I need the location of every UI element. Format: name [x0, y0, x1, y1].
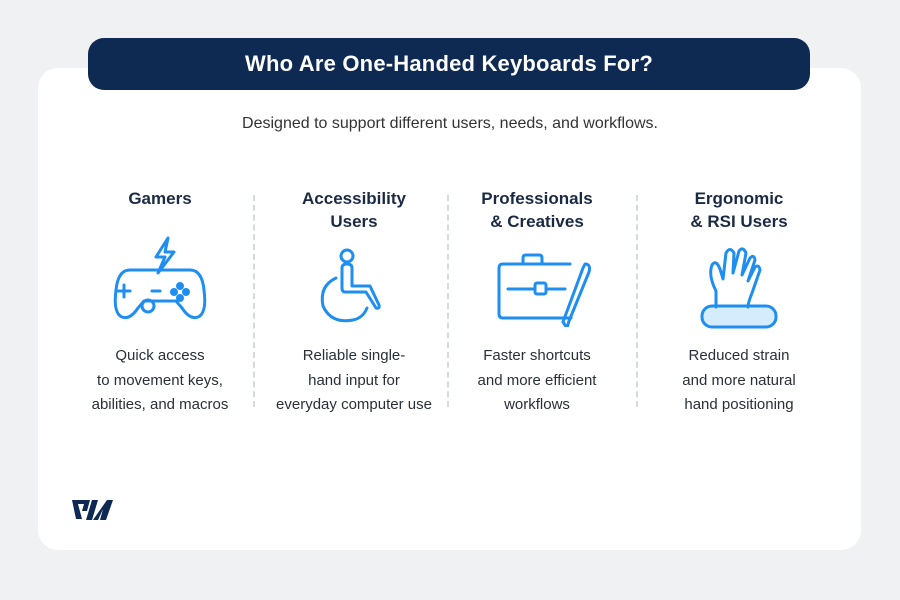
title: Who Are One-Handed Keyboards For?: [245, 51, 653, 76]
logo: [72, 500, 113, 520]
description: gamers: [92, 347, 228, 413]
description: gamers: Quick access: [115, 347, 205, 364]
description: gamers: abilities, and macros: [92, 396, 228, 413]
title: [88, 38, 810, 90]
description: ergonomic: Reduced strain: [689, 347, 789, 364]
description: ergonomic: hand positioning: [684, 396, 794, 413]
description: professionals: and more efficient: [478, 372, 596, 388]
heading: professionals: & Creatives: [490, 212, 584, 231]
heading: ergonomic: & RSI Users: [690, 212, 788, 231]
heading: professionals: Professionals: [481, 189, 593, 208]
column: professionals: [478, 189, 596, 413]
description: ergonomic: and more natural: [682, 372, 796, 388]
icon: briefcase and pencil: [498, 254, 591, 327]
description: gamers: to movement keys,: [97, 372, 223, 388]
heading: accessibility: Accessibility: [302, 189, 406, 208]
heading: accessibility: [302, 189, 406, 231]
icon: hand on rest: [700, 247, 778, 328]
heading: gamers: Gamers: [128, 189, 192, 208]
description: ergonomic: [682, 347, 796, 413]
heading: ergonomic: [690, 189, 788, 231]
icon: wheelchair: [320, 248, 381, 322]
description: professionals: workflows: [504, 396, 570, 413]
description: professionals: [478, 347, 596, 413]
card: [38, 68, 861, 550]
description: accessibility: Reliable single-: [303, 347, 405, 364]
description: professionals: Faster shortcuts: [483, 347, 591, 364]
column: ergonomic: [682, 189, 796, 413]
description: accessibility: hand input for: [308, 372, 400, 388]
heading: ergonomic: Ergonomic: [695, 189, 783, 208]
heading: professionals: [481, 189, 593, 231]
subtitle: Designed to support different users, needs, and workflows.: [242, 115, 658, 132]
description: accessibility: everyday computer use: [276, 396, 432, 413]
heading: accessibility: Users: [330, 212, 378, 231]
column: accessibility: [276, 189, 432, 413]
icon: game controller: [114, 236, 206, 320]
column: gamers: [92, 189, 228, 413]
description: accessibility: [276, 347, 432, 413]
